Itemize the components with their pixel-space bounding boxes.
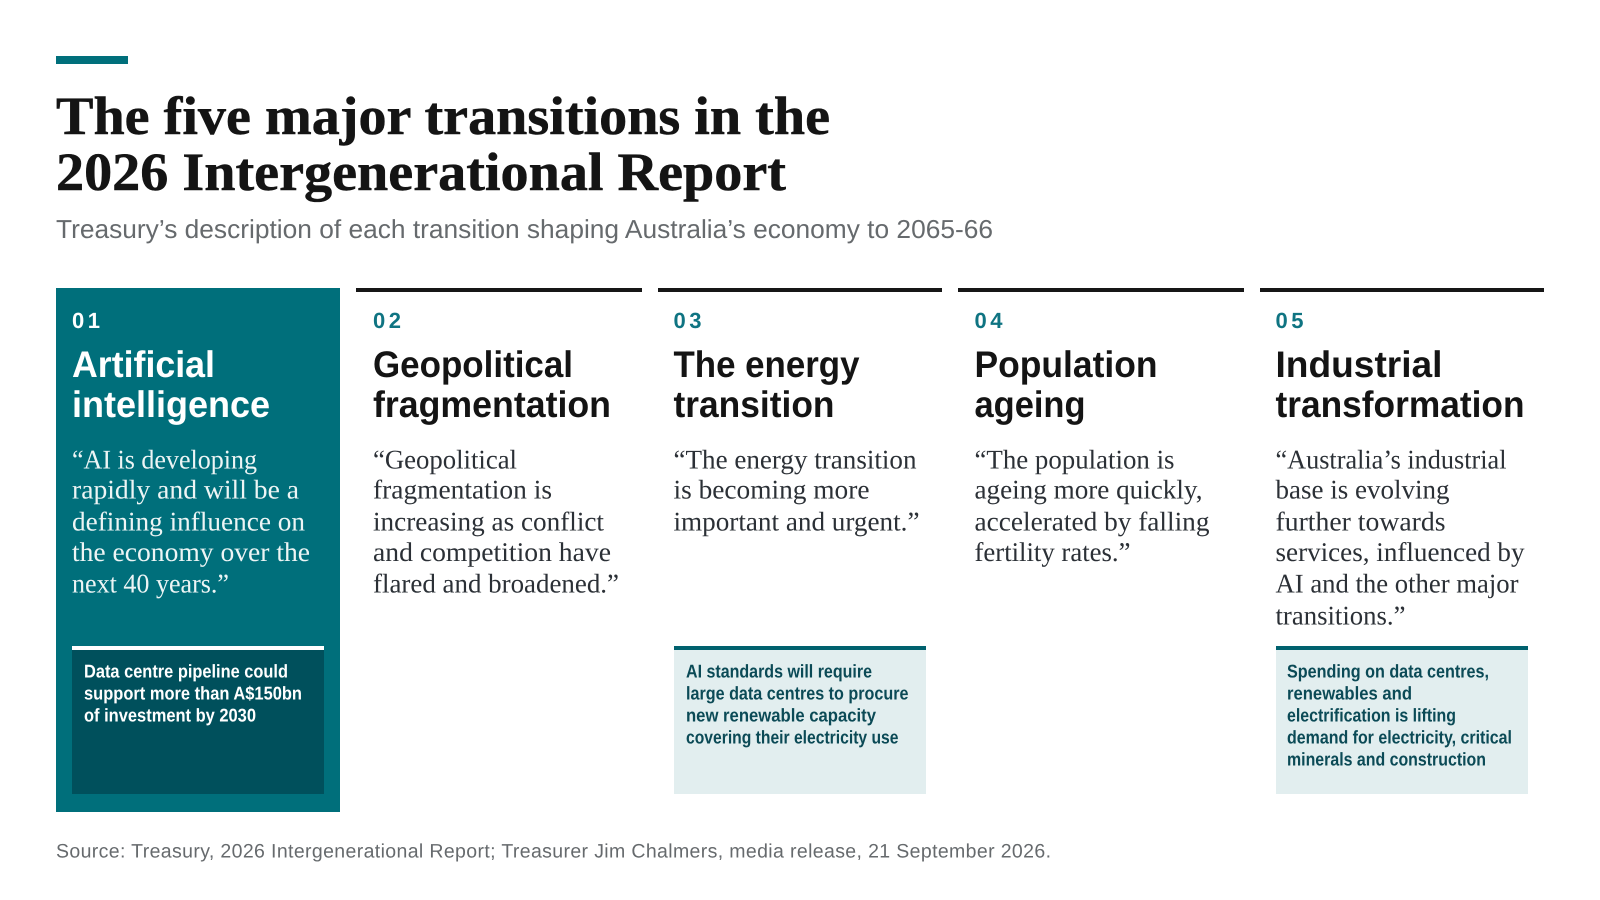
callout: support more than A$150bn bbox=[84, 682, 302, 704]
heading: fragmentation bbox=[373, 384, 611, 425]
panel: the energy transition bbox=[658, 288, 942, 794]
callout: minerals and construction bbox=[1287, 748, 1486, 770]
callout: renewables and bbox=[1287, 682, 1412, 704]
heading bbox=[674, 344, 860, 425]
quote: transitions.” bbox=[1276, 600, 1406, 630]
heading: Geopolitical bbox=[373, 344, 573, 385]
quote: AI and the other major bbox=[1276, 568, 1519, 598]
title: The five major transitions in the bbox=[56, 86, 830, 146]
callout: of investment by 2030 bbox=[84, 704, 256, 726]
quote: increasing as conflict bbox=[373, 506, 604, 536]
panel: geopolitical fragmentation bbox=[356, 288, 642, 598]
quote: flared and broadened.” bbox=[373, 568, 619, 598]
number: 04 bbox=[974, 308, 1003, 333]
quote bbox=[72, 444, 310, 598]
callout bbox=[72, 646, 324, 794]
quote: fertility rates.” bbox=[974, 537, 1130, 567]
quote: important and urgent.” bbox=[674, 506, 920, 536]
quote: “The energy transition bbox=[674, 444, 917, 474]
quote: the economy over the bbox=[72, 537, 310, 567]
callout: AI standards will require bbox=[686, 660, 872, 682]
title bbox=[56, 86, 830, 202]
source note: Source: Treasury, 2026 Intergenerational Report; Treasurer Jim Chalmers, media release, 21 September 2026. bbox=[56, 840, 1051, 862]
callout: new renewable capacity bbox=[686, 704, 877, 726]
callout bbox=[674, 646, 926, 794]
callout: large data centres to procure bbox=[686, 682, 908, 704]
heading: Artificial bbox=[72, 344, 215, 385]
number: 02 bbox=[373, 308, 401, 333]
quote: accelerated by falling bbox=[974, 506, 1210, 536]
quote: next 40 years.” bbox=[72, 568, 229, 598]
callout: covering their electricity use bbox=[686, 726, 898, 748]
panel: industrial transformation bbox=[1260, 288, 1544, 794]
top rule bbox=[1260, 288, 1544, 292]
callout: Spending on data centres, bbox=[1287, 660, 1489, 682]
callout: Data centre pipeline could bbox=[84, 660, 288, 682]
heading: The energy bbox=[674, 344, 860, 385]
heading bbox=[974, 344, 1158, 425]
callout bbox=[1276, 646, 1528, 794]
quote: rapidly and will be a bbox=[72, 474, 299, 504]
panel background bbox=[56, 288, 340, 812]
quote bbox=[974, 444, 1210, 567]
heading: intelligence bbox=[72, 384, 270, 425]
top rule bbox=[356, 288, 642, 292]
number: 03 bbox=[674, 308, 702, 333]
panel: artificial intelligence bbox=[56, 288, 340, 812]
heading: transformation bbox=[1276, 384, 1524, 425]
heading: ageing bbox=[974, 384, 1086, 425]
quote: fragmentation is bbox=[373, 474, 552, 504]
quote: defining influence on bbox=[72, 506, 305, 536]
heading: transition bbox=[674, 384, 834, 425]
number: 01 bbox=[72, 308, 100, 333]
heading: Population bbox=[974, 344, 1158, 385]
quote: is becoming more bbox=[674, 474, 870, 504]
quote: further towards bbox=[1276, 506, 1446, 536]
quote: “AI is developing bbox=[72, 444, 257, 474]
quote: “The population is bbox=[974, 444, 1174, 474]
top rule bbox=[958, 288, 1244, 292]
heading: Industrial bbox=[1276, 344, 1442, 385]
heading bbox=[72, 344, 270, 425]
accent bar bbox=[56, 56, 128, 64]
top rule bbox=[658, 288, 942, 292]
callout: demand for electricity, critical bbox=[1287, 726, 1512, 748]
quote bbox=[1276, 444, 1525, 630]
heading bbox=[1276, 344, 1524, 425]
quote bbox=[373, 444, 619, 598]
panel: population ageing bbox=[958, 288, 1244, 567]
quote: ageing more quickly, bbox=[974, 474, 1202, 504]
heading bbox=[373, 344, 611, 425]
quote: services, influenced by bbox=[1276, 537, 1525, 567]
quote: base is evolving bbox=[1276, 474, 1450, 504]
callout: electrification is lifting bbox=[1287, 704, 1456, 726]
quote: “Geopolitical bbox=[373, 444, 517, 474]
title: 2026 Intergenerational Report bbox=[56, 142, 786, 202]
number: 05 bbox=[1276, 308, 1304, 333]
quote: and competition have bbox=[373, 537, 611, 567]
quote bbox=[674, 444, 920, 536]
subtitle: Treasury’s description of each transition shaping Australia’s economy to 2065-66 bbox=[56, 214, 993, 244]
quote: “Australia’s industrial bbox=[1276, 444, 1506, 474]
